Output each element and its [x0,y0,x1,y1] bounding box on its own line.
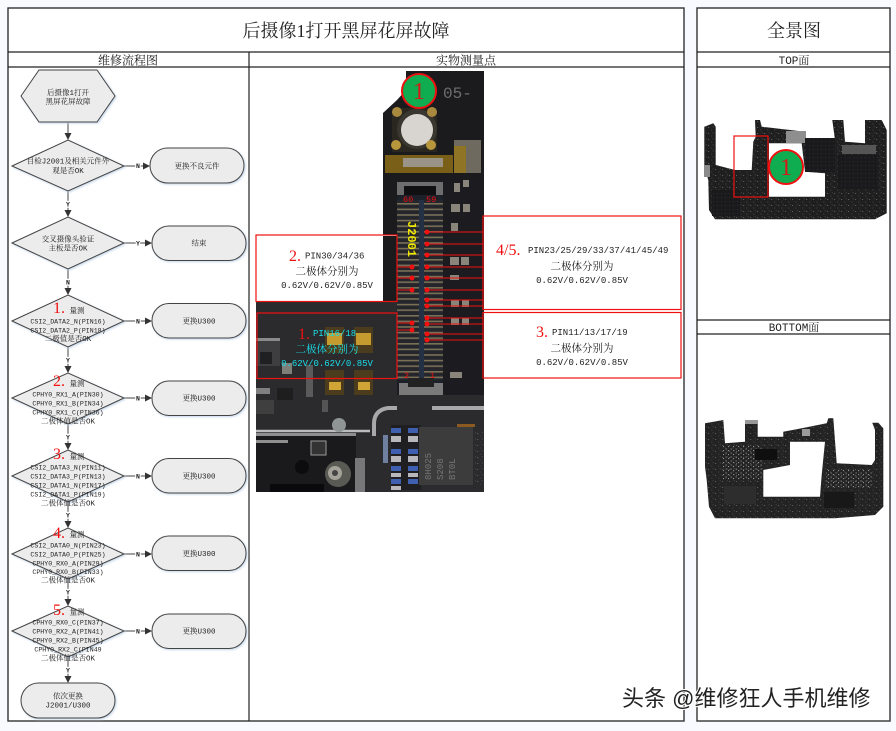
decision: visual check [12,140,140,208]
decision: step 4 [12,525,140,596]
heading: repair flowchart: 维修流程图 [98,52,158,68]
decision: step 3: 3. [53,446,65,463]
decision: step 4: CSI2_DATA0_P(PIN25) [30,552,106,558]
decision: step 5: Y [66,668,70,674]
J2001 label and pin numbers: 60 [403,195,413,205]
decision: cross verify [12,217,140,286]
decision: step 4: N [136,552,140,558]
J2001 label and pin numbers: 59 [426,195,436,205]
decision: step 4: Y [66,590,70,596]
result: replace U300 (1) [152,304,246,338]
result: replace U300 (4): 更换U300 [182,548,216,559]
gold pads [325,327,373,395]
decision: step 5: 5. [53,602,65,619]
decision: step 1: 二极值是否OK [45,333,92,344]
flow start hexagon [21,70,115,122]
panel: flowchart [12,70,246,718]
panel: board photo [256,71,484,492]
decision: cross verify: N [66,280,70,286]
lower left parts [256,338,328,414]
decision: step 2: CPHY0_RX1_C(PIN36) [32,410,104,416]
decision: visual check: Y [66,202,70,208]
silver tracks [256,408,484,436]
callout: step 1: 0.62V/0.62V/0.85V [281,359,374,369]
result: replace U300 (1): 更换U300 [182,316,216,326]
decision: step 5: CPHY0_RX0_C(PIN37) [32,620,104,626]
title: 后摄像1打开黑屏花屏故障 [242,21,450,41]
top view marker [769,150,803,184]
callout: step 1: 二极体分别为 [296,342,358,356]
heading: top side: TOP面 [779,54,809,68]
heading: overview: 全景图 [767,21,821,41]
result: replace U300 (2) [152,381,246,416]
decision: step 1: 量测 [70,305,85,316]
decision: step 4: CPHY0_RX0_B(PIN33) [32,569,104,576]
decision: step 5: CPHY0_RX2_C(PIN49 [34,646,102,654]
decision: step 3: CSI2_DATA1_N(PIN17) [30,482,106,490]
decision: step 5: 二极体值是否OK [41,652,95,664]
white cut-out behind label 2 [256,235,397,302]
top view locator box [734,136,768,197]
flow start hexagon: 后摄像1打开 [47,87,89,98]
callout: step 2: 0.62V/0.62V/0.85V [281,281,374,291]
IC chip: BT0L [448,458,458,480]
flow end: replace J2001/U300: 依次更换 [53,690,83,702]
decision: cross verify: 交叉摄像头验证 [42,234,95,244]
decision: step 5: CPHY0_RX2_A(PIN41) [32,628,104,636]
decision: step 2 [12,373,140,442]
result: replace parts [150,148,244,183]
decision: step 3: CSI2_DATA3_N(PIN11) [30,464,106,472]
small blue capacitors [383,425,421,490]
callout: step 3 [483,312,681,378]
flow end: replace J2001/U300 [21,683,115,718]
callout: step 1 [257,313,397,378]
decision: step 1: 1. [53,300,65,317]
decision: step 4: 二极体值是否OK [41,574,95,586]
decision: step 3: N [136,474,140,480]
decision: step 2: 二极体值是否OK [41,416,95,426]
board thumbnail: top [704,120,887,219]
decision: step 5: 量测 [70,606,85,618]
decision: step 2: CPHY0_RX1_B(PIN34) [32,400,104,408]
silkscreen marks: 05- [443,85,472,103]
callout: step 1: PIN16/18 [313,329,356,339]
decision: step 2: Y [66,434,70,442]
decision: visual check: N [136,163,140,170]
result: replace U300 (5) [152,614,246,648]
decision: step 5 [12,602,140,674]
panel: overview [697,8,890,721]
heading: bottom side: BOTTOM面 [769,321,819,335]
decision: step 2: N [136,396,140,402]
decision: cross verify: Y [136,240,140,248]
J2001 label and pin numbers: 1 [430,371,435,381]
decision: step 4: 量测 [70,529,85,540]
J2001 label and pin numbers: 2 [404,371,409,381]
callout: step 4/5: 二极体分别为 [550,260,614,272]
callout: step 3: 二极体分别为 [550,342,614,354]
decision: step 3 [12,446,140,520]
decision: step 3: 二极体值是否OK [41,498,95,508]
decision: step 2: 2. [53,373,65,390]
callout: step 2: 二极体分别为 [296,264,358,278]
callout: step 4/5 [483,216,681,310]
result: replace U300 (4) [152,536,246,570]
decision: step 5: CPHY0_RX2_B(PIN45) [32,638,104,644]
IC chip [419,424,484,485]
callout: step 3: 3. [536,324,548,341]
result: replace U300 (2): 更换U300 [182,392,216,404]
pin markers right side [424,230,483,342]
decision: cross verify: 主板是否OK [48,242,88,254]
decision: step 1: CSI2_DATA2_P(PIN18) [30,328,106,334]
pin markers left side [397,264,414,332]
decision: step 4: CPHY0_RX0_A(PIN29) [32,560,104,568]
panel: main frame [8,8,684,721]
IC chip: S208 [436,458,446,480]
callout: step 4/5: 4/5. [496,242,520,259]
decision: step 3: CSI2_DATA3_P(PIN13) [30,474,106,480]
decision: visual check: 观是否OK [52,166,84,176]
connectors and arrows [64,122,152,683]
callout: step 3: 0.62V/0.62V/0.85V [536,358,628,368]
callout: step 2: PIN30/34/36 [305,252,364,262]
side components [450,180,470,378]
decision: step 1 [12,295,140,364]
IC chip: 8H025 [424,453,434,480]
result: replace U300 (3) [152,458,246,493]
result: replace parts: 更换不良元件 [174,160,220,172]
board base [256,71,484,492]
result: end [152,226,246,260]
decision: step 1: CSI2_DATA2_N(PIN16) [30,318,106,326]
step 1 marker: 1 [413,79,425,105]
decision: step 1: Y [66,358,70,364]
callout: step 2 [256,235,397,302]
decision: step 2: CPHY0_RX1_A(PIN30) [32,392,104,398]
result: replace U300 (5): 更换U300 [182,626,216,636]
top view marker: 1 [780,155,792,181]
decision: step 2: 量测 [70,378,85,389]
decision: step 3: Y [66,512,70,520]
callout: step 3: PIN11/13/17/19 [552,328,628,338]
decision: step 3: 量测 [70,451,85,462]
flow start hexagon: 黑屏花屏故障 [46,96,91,107]
callout: step 2: 2. [289,248,301,265]
decision: visual check: 目检J2001及相关元件外 [27,156,110,166]
decision: step 4: CSI2_DATA0_N(PIN23) [30,542,106,550]
decision: step 3: CSI2_DATA1_P(PIN19) [30,492,106,498]
result: end: 结束 [192,238,207,248]
heading: measuring points: 实物测量点 [436,52,497,68]
decision: step 4: 4. [53,525,65,542]
callout: step 4/5: 0.62V/0.62V/0.85V [536,276,628,286]
board thumbnail: bottom [705,418,883,518]
callout: step 4/5: PIN23/25/29/33/37/41/45/49 [528,246,668,256]
camera bracket [256,418,365,492]
decision: step 5: N [136,628,140,636]
flow end: replace J2001/U300: J2001/U300 [45,702,91,710]
camera ring with gold beads [391,107,437,152]
J2001 label and pin numbers: J2001 [404,221,418,257]
gold strip and clips [385,140,481,173]
result: replace U300 (3): 更换U300 [182,470,216,482]
watermark: 头条 @维修狂人手机维修 [622,686,870,711]
connector J2001 [397,182,443,395]
decision: step 1: N [136,318,140,326]
step 1 marker [402,74,436,108]
callout: step 1: 1. [298,326,310,343]
J2001 label and pin numbers [403,195,436,381]
